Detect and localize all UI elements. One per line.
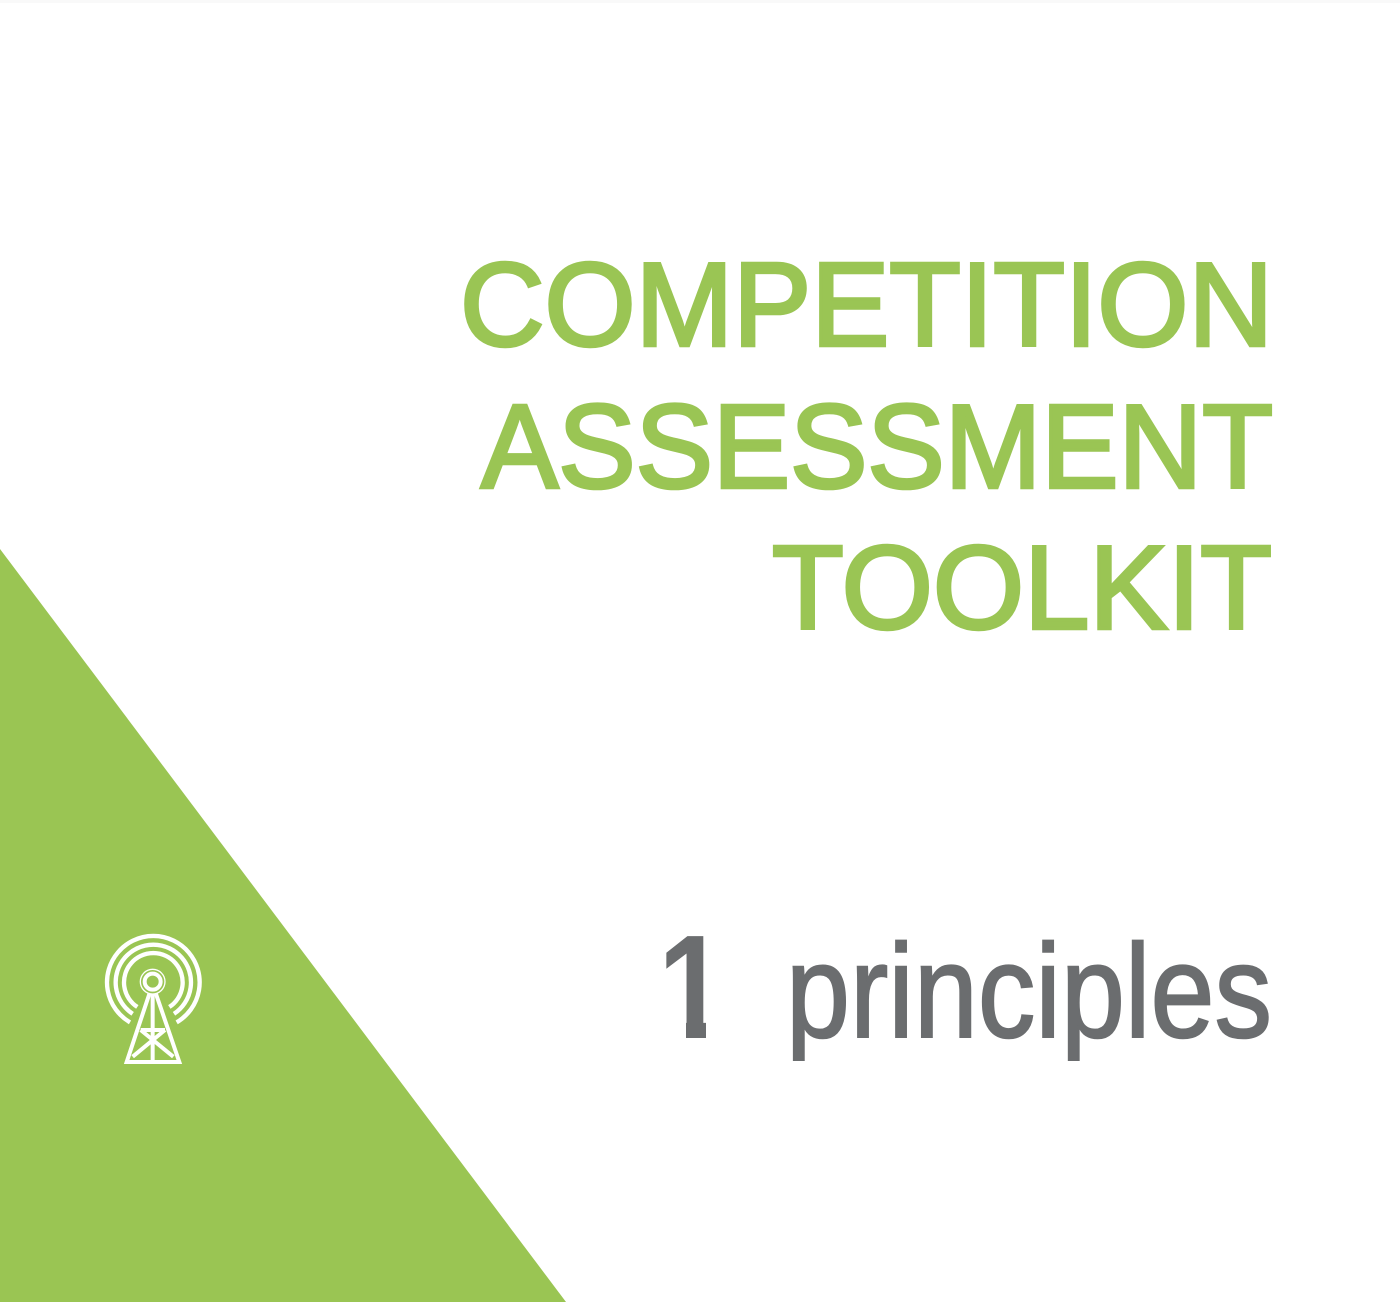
title line: ASSESSMENT: ASSESSMENT [481, 380, 1273, 514]
section label: principles: principles [786, 918, 1272, 1066]
signal arcs [107, 936, 200, 1022]
title line: COMPETITION: COMPETITION [460, 238, 1273, 372]
icon: radio tower [107, 936, 200, 1062]
green corner triangle [0, 549, 566, 1302]
infographic canvas [0, 260, 1272, 1302]
title line: TOOLKIT: TOOLKIT [772, 522, 1272, 654]
tower frame [127, 994, 179, 1062]
section number: 1 [658, 905, 726, 1070]
title [460, 238, 1273, 654]
beacon rings [140, 969, 165, 994]
